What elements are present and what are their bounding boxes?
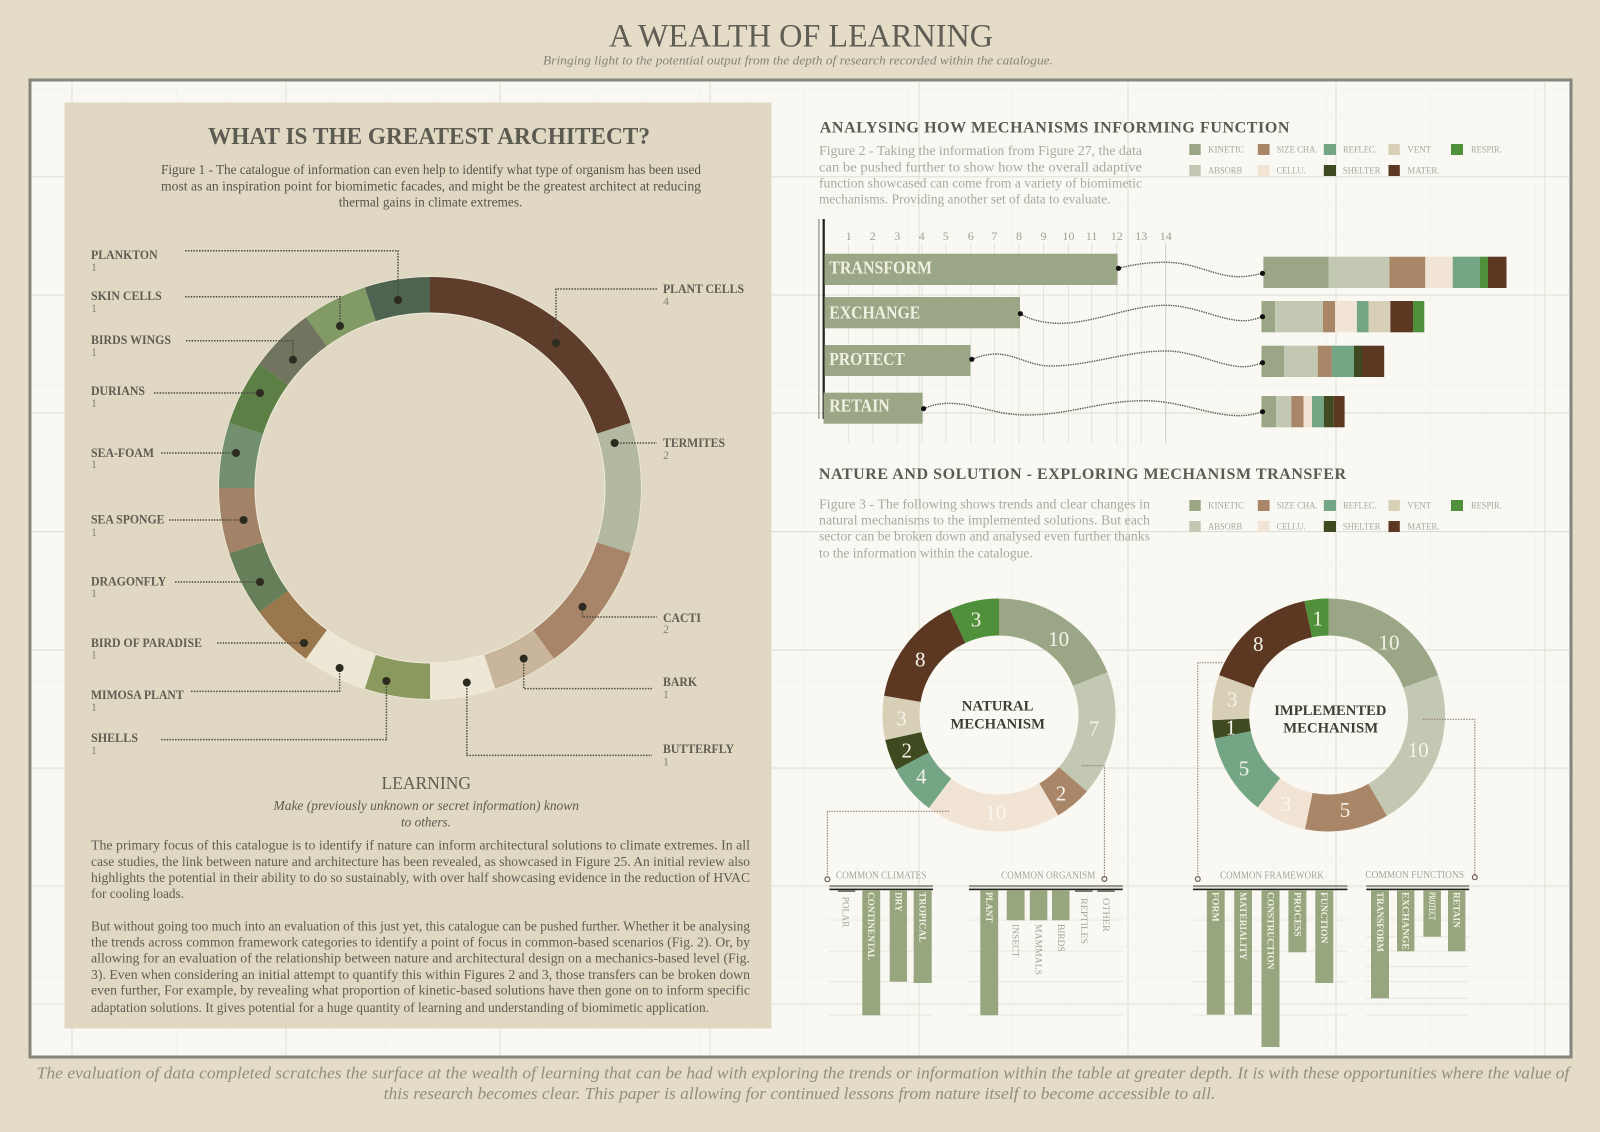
- legend: figure 3: REFLEC.: [1343, 501, 1377, 511]
- figure 2 axis scale: [818, 219, 1172, 443]
- callout: mimosa plant: MIMOSA PLANT: [91, 687, 184, 702]
- callout: cacti: 2: [663, 622, 669, 636]
- donut chart: implemented mechanism: 3: [1227, 687, 1238, 711]
- callout: durians: DURIANS: [91, 383, 145, 398]
- callout: cacti: [578, 603, 701, 636]
- donut chart: natural mechanism: [896, 607, 1099, 825]
- figure 2 axis scale: 13: [1135, 229, 1147, 243]
- bar: exchange: EXCHANGE: [829, 302, 920, 322]
- legend: figure 3: RESPIR.: [1471, 501, 1502, 511]
- donut chart: natural mechanism: 2: [901, 739, 912, 763]
- donut label: implemented mechanism: [1274, 703, 1387, 737]
- bar chart: common climates: [829, 871, 933, 1015]
- figure 1 description: thermal gains in climate extremes.: [339, 196, 522, 211]
- callout: butterfly: 1: [663, 755, 669, 769]
- legend: figure 2: MATER.: [1407, 166, 1440, 176]
- donut chart: implemented mechanism: [1226, 606, 1429, 822]
- body paragraph 1: The primary focus of this catalogue is to identify if nature can inform architectural solutions to climate extremes. In all: [91, 838, 750, 853]
- callout: termites: 2: [663, 448, 669, 462]
- donut label: natural mechanism: MECHANISM: [950, 716, 1045, 732]
- body paragraph 2: even further, For example, by revealing what proportion of kinetic-based solutions have then gone on to inform specific: [91, 983, 750, 998]
- figure 3 description: sector can be broken down and analysed even further thanks: [819, 529, 1150, 544]
- bar chart: common functions: RETAIN: [1451, 892, 1461, 928]
- callout: sea sponge: [91, 512, 248, 539]
- legend: figure 2: VENT: [1407, 146, 1431, 156]
- legend: figure 2: [1189, 144, 1502, 176]
- bar chart: common framework: FORM: [1210, 892, 1220, 922]
- bar chart: common climates: POLAR: [839, 897, 849, 928]
- bar chart: common framework: COMMON FRAMEWORK: [1220, 871, 1325, 882]
- legend: figure 2: KINETIC: [1208, 146, 1244, 156]
- bar chart: common climates: CONTINENTAL: [865, 892, 875, 960]
- callout: shells: 1: [91, 743, 97, 757]
- callout: dragonfly: [91, 574, 264, 600]
- closing statement: The evaluation of data completed scratches the surface at the wealth of learning that can be had with exploring the trends or information within the table at greater depth. It is with these opportunities where the value of: [37, 1064, 1572, 1083]
- callout: mimosa plant: [91, 664, 344, 714]
- bar chart: common organism: REPTILES: [1078, 898, 1088, 944]
- donut chart: natural mechanism: 8: [915, 647, 926, 671]
- figure 2 axis scale: 12: [1111, 229, 1123, 243]
- callout: sea-foam: 1: [91, 457, 97, 471]
- bar chart: common framework: [1193, 871, 1347, 1047]
- callout: skin cells: SKIN CELLS: [91, 288, 162, 303]
- figure 2 axis scale: 8: [1016, 229, 1022, 243]
- figure 2 axis scale: 3: [894, 229, 900, 243]
- body paragraph 1: highlights the potential in their ability to do so sustainably, with over half showcasing evidence in the reduction of HVAC: [91, 870, 750, 885]
- bar chart: common climates: COMMON CLIMATES: [836, 871, 926, 882]
- callout: butterfly: BUTTERFLY: [663, 741, 735, 756]
- bar chart: common functions: PROTECT: [1426, 892, 1436, 920]
- bar chart: common climates: TROPICAL: [917, 892, 927, 943]
- stacked bar: protect: [1262, 346, 1384, 377]
- legend: figure 2: ABSORB: [1208, 166, 1242, 176]
- legend: figure 2: SIZE CHA.: [1277, 146, 1318, 156]
- legend: figure 3: [1189, 500, 1502, 532]
- body paragraph 1: [91, 838, 750, 901]
- heading: nature and solution: NATURE AND SOLUTION - EXPLORING MECHANISM TRANSFER: [819, 466, 1346, 483]
- title: A WEALTH OF LEARNING: [609, 19, 993, 55]
- callout: sea-foam: SEA-FOAM: [91, 445, 154, 460]
- legend: figure 2: REFLEC.: [1343, 146, 1377, 156]
- learning definition: Make (previously unknown or secret information) known: [273, 798, 579, 813]
- donut chart: implemented mechanism: 1: [1312, 606, 1323, 630]
- callout: birds wings: 1: [91, 345, 97, 359]
- callout: sea sponge: SEA SPONGE: [91, 512, 164, 526]
- figure 2 description: function showcased can come from a variety of biomimetic: [819, 175, 1142, 190]
- body paragraph 1: for cooling loads.: [91, 886, 184, 901]
- figure 2 description: can be pushed further to show how the overall adaptive: [819, 160, 1142, 175]
- bar chart: common organism: PLANT: [983, 892, 993, 923]
- figure 1 description: Figure 1 - The catalogue of information can even help to identify what type of organism has been used: [161, 163, 701, 178]
- subtitle: Bringing light to the potential output from the depth of research recorded within the catalogue.: [543, 52, 1053, 67]
- callout: plankton: 1: [91, 260, 97, 274]
- callout: bark: 1: [663, 687, 669, 701]
- body paragraph 2: But without going too much into an evaluation of this just yet, this catalogue can be pushed further. Whether it be analysing: [91, 919, 750, 934]
- donut chart: natural mechanism: 4: [916, 765, 927, 789]
- callout: plant cells: 4: [663, 294, 669, 308]
- figure 2 axis scale: 7: [991, 229, 997, 243]
- bar chart: common climates: DRY: [892, 892, 902, 912]
- connector: common climates: [825, 811, 949, 882]
- callout: cacti: CACTI: [663, 610, 701, 625]
- donut chart: implemented mechanism: 1: [1226, 716, 1236, 740]
- figure 1 description: [161, 163, 701, 211]
- learning definition: [273, 798, 579, 829]
- donut chart: natural mechanism: 2: [1056, 781, 1066, 805]
- figure 2 axis scale: 4: [919, 229, 925, 243]
- callout: dragonfly: 1: [91, 586, 97, 600]
- legend: figure 3: SIZE CHA.: [1277, 501, 1318, 511]
- figure 3 description: natural mechanisms to the implemented solutions. But each: [819, 512, 1150, 527]
- panel: what is the greatest architect: [64, 102, 772, 1028]
- body paragraph 2: adaptation solutions. It gives potential for a huge quantity of learning and understanding of biomimetic application.: [91, 1000, 709, 1015]
- bar: exchange: [824, 297, 1020, 328]
- donut label: natural mechanism: NATURAL: [962, 698, 1034, 714]
- figure 2 description: mechanisms. Providing another set of data to evaluate.: [819, 191, 1110, 206]
- stacked bar: retain: [1262, 396, 1345, 427]
- figure 2 axis scale: 6: [968, 229, 974, 243]
- figure 2 axis scale: 10: [1062, 229, 1074, 243]
- figure 3 description: to the information within the catalogue.: [819, 545, 1033, 560]
- bar chart: common organism: MAMMALS: [1032, 924, 1042, 975]
- callout: bark: BARK: [663, 674, 698, 689]
- donut chart: natural mechanism: 10: [985, 801, 1006, 825]
- callout: bird of paradise: [91, 635, 308, 662]
- callout: bark: [520, 655, 698, 701]
- connector: common functions: [1423, 719, 1477, 880]
- callout: mimosa plant: 1: [91, 700, 97, 714]
- stacked bar: transform: [1263, 257, 1506, 288]
- donut chart: natural mechanism: 7: [1089, 716, 1099, 740]
- connector: common framework: [1195, 663, 1222, 881]
- bar chart: common organism: [969, 871, 1123, 1015]
- bar: transform: TRANSFORM: [829, 257, 932, 277]
- callout: shells: [91, 677, 390, 757]
- bar: transform: [824, 254, 1118, 285]
- legend: figure 3: VENT: [1407, 501, 1431, 511]
- callout: plant cells: PLANT CELLS: [663, 281, 744, 296]
- legend: figure 2: CELLU.: [1277, 166, 1305, 176]
- donut label: natural mechanism: [950, 698, 1045, 732]
- figure 2 axis scale: 14: [1160, 229, 1172, 243]
- callout: birds wings: BIRDS WINGS: [91, 332, 171, 347]
- donut label: implemented mechanism: IMPLEMENTED: [1274, 703, 1387, 719]
- learning heading: LEARNING: [382, 773, 471, 793]
- callout: durians: 1: [91, 396, 97, 410]
- callout: plankton: PLANKTON: [91, 247, 158, 262]
- heading: analysing mechanisms: ANALYSING HOW MECHANISMS INFORMING FUNCTION: [820, 120, 1290, 137]
- donut chart: implemented mechanism: 5: [1340, 798, 1350, 822]
- organism ring chart: [219, 277, 641, 699]
- bar chart: common functions: [1365, 870, 1469, 1015]
- callout: termites: [611, 435, 725, 462]
- callout: skin cells: 1: [91, 301, 97, 315]
- bar: protect: PROTECT: [829, 349, 905, 369]
- body paragraph 1: case studies, the link between nature and architecture has been revealed, as showcased in Figure 25. An initial review also: [91, 854, 750, 869]
- figure 2 axis scale: 9: [1040, 229, 1046, 243]
- callout: skin cells: [91, 288, 344, 330]
- donut chart: implemented mechanism: 10: [1378, 630, 1400, 654]
- learning definition: to others.: [401, 814, 451, 829]
- body paragraph 2: the trends across common framework categories to identify a point of focus in common-based scenarios (Fig. 2). Or, by: [91, 934, 750, 949]
- figure 2 axis scale: 1: [846, 229, 852, 243]
- bar: protect: [824, 345, 970, 376]
- callout: birds wings: [91, 332, 297, 364]
- bar chart: common functions: EXCHANGE: [1400, 892, 1410, 950]
- donut chart: implemented mechanism: 8: [1253, 632, 1263, 656]
- stacked bar: exchange: [1262, 301, 1424, 332]
- callout: termites: TERMITES: [663, 435, 725, 450]
- figure 2 axis scale: 11: [1086, 229, 1097, 243]
- legend: figure 3: CELLU.: [1277, 522, 1305, 532]
- figure 3 description: Figure 3 - The following shows trends and clear changes in: [819, 496, 1150, 511]
- bar chart: common organism: COMMON ORGANISM: [1001, 871, 1095, 882]
- body paragraph 2: [91, 919, 750, 1015]
- donut chart: natural mechanism: 3: [971, 607, 981, 631]
- bar chart: common functions: COMMON FUNCTIONS: [1365, 870, 1464, 881]
- figure 2 axis scale: 2: [870, 229, 876, 243]
- legend: figure 3: KINETIC: [1208, 501, 1244, 511]
- callout: shells: SHELLS: [91, 730, 138, 745]
- bar chart: common framework: CONSTRUCTION: [1264, 892, 1274, 969]
- callout: plant cells: [552, 281, 744, 347]
- callout: sea sponge: 1: [91, 525, 97, 539]
- legend: figure 3: SHELTER: [1343, 522, 1381, 532]
- panel heading: WHAT IS THE GREATEST ARCHITECT?: [208, 124, 650, 150]
- figure 2 description: Figure 2 - Taking the information from Figure 27, the data: [819, 143, 1142, 158]
- legend: figure 2: SHELTER: [1343, 166, 1381, 176]
- callout: bird of paradise: BIRD OF PARADISE: [91, 635, 202, 650]
- donut label: implemented mechanism: MECHANISM: [1283, 721, 1378, 737]
- legend: figure 2: RESPIR.: [1471, 146, 1502, 156]
- donut chart: implemented mechanism: 3: [1281, 792, 1291, 816]
- body paragraph 2: allowing for an evaluation of the relationship between nature and architectural design on a mechanics-based level (Fig.: [91, 950, 750, 966]
- donut chart: implemented mechanism: 10: [1408, 738, 1429, 762]
- figure 2 axis scale: 5: [943, 229, 949, 243]
- bar chart: common organism: OTHER: [1100, 898, 1110, 932]
- legend: figure 3: MATER.: [1407, 522, 1440, 532]
- bar chart: common functions: TRANSFORM: [1374, 892, 1384, 952]
- callout: durians: [91, 383, 264, 410]
- callout: sea-foam: [91, 445, 240, 471]
- closing statement: [37, 1064, 1572, 1103]
- figure 2 description: [819, 143, 1142, 206]
- callout: bird of paradise: 1: [91, 648, 97, 662]
- donut chart: implemented mechanism: 5: [1239, 756, 1249, 780]
- bar: retain: RETAIN: [829, 396, 890, 416]
- bar chart: common framework: PROCESS: [1291, 892, 1301, 937]
- donut chart: natural mechanism: 3: [896, 706, 907, 730]
- closing statement: this research becomes clear. This paper is allowing for continued lessons from nature itself to become accessible to all.: [384, 1084, 1215, 1103]
- figure 1 description: most as an inspiration point for biomimetic facades, and might be the greatest architect at reducing: [161, 180, 701, 195]
- bar chart: common framework: MATERIALITY: [1237, 892, 1247, 960]
- body paragraph 2: 3). Even when considering an initial attempt to quantify this within Figures 2 and 3, those transfers can be broken down: [91, 967, 750, 982]
- donut chart: natural mechanism: 10: [1048, 627, 1069, 651]
- bar chart: common organism: BIRDS: [1055, 924, 1065, 952]
- callout: dragonfly: DRAGONFLY: [91, 574, 167, 589]
- callout: butterfly: [463, 678, 735, 769]
- bar chart: common organism: INSECT: [1010, 924, 1020, 957]
- figure 3 description: [819, 496, 1150, 560]
- connector: common organism: [1082, 766, 1107, 881]
- legend: figure 3: ABSORB: [1208, 522, 1242, 532]
- connector curves: [921, 262, 1265, 416]
- callout: plankton: [91, 247, 402, 304]
- bar: retain: [824, 393, 923, 424]
- bar chart: common framework: FUNCTION: [1318, 892, 1328, 943]
